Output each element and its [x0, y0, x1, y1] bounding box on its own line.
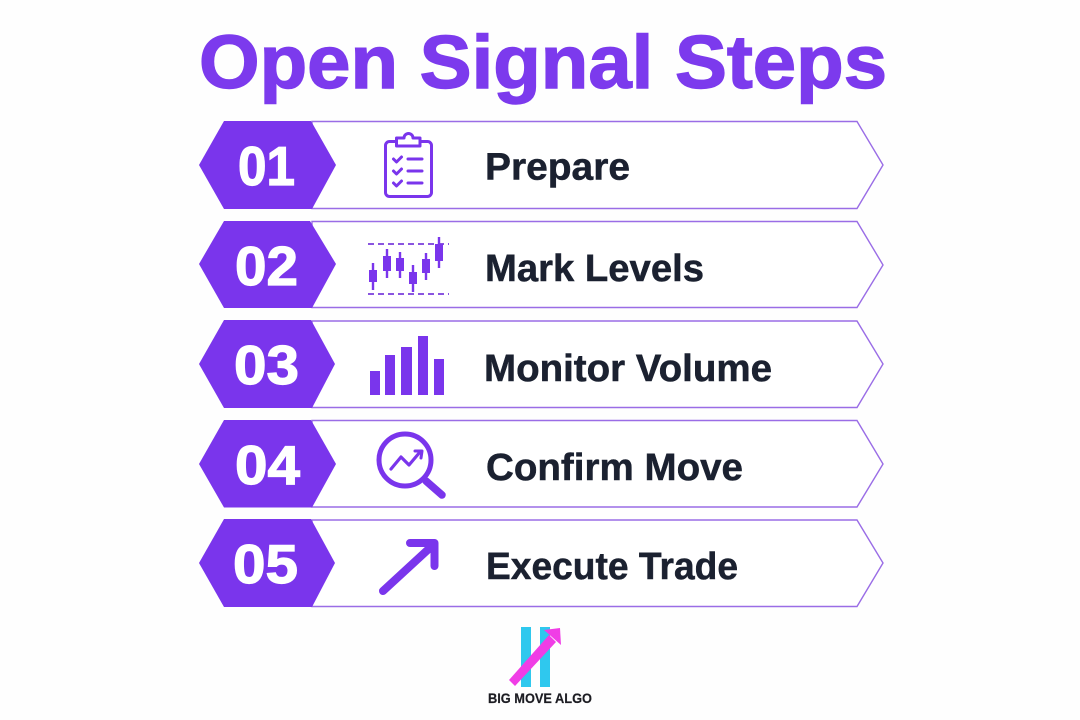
step 4 hexagon: [199, 420, 336, 508]
icon: clipboard checklist: [386, 134, 432, 196]
step 4 label: Confirm Move: [486, 447, 743, 489]
step 1 number: 01: [238, 135, 295, 197]
icon: candlestick chart with levels: [368, 237, 449, 294]
step 4 outline: [312, 420, 883, 507]
icon: diagonal arrow: [383, 543, 434, 591]
step 1 hexagon: [199, 121, 336, 209]
step 4: confirm move: [199, 420, 883, 508]
step 4 number: 04: [235, 434, 300, 496]
logo mark: [509, 627, 561, 687]
step 2 number: 02: [235, 235, 298, 297]
title: Open Signal Steps: [199, 20, 887, 104]
step 5 label: Execute Trade: [486, 546, 738, 588]
step 5 hexagon: [199, 519, 335, 607]
step 3 hexagon: [199, 320, 335, 408]
logo wordmark: BIG MOVE ALGO: [488, 690, 592, 706]
icon: volume bars: [370, 336, 444, 395]
step 2 outline: [312, 222, 883, 308]
step 5 number: 05: [233, 533, 298, 595]
step 3: monitor volume: [199, 320, 883, 408]
step 2: mark levels: [199, 221, 883, 308]
step 1 label: Prepare: [485, 146, 630, 188]
step 3 label: Monitor Volume: [484, 348, 772, 390]
logo: big move algo: [488, 627, 592, 706]
step 1 outline: [312, 122, 883, 208]
step 5: execute trade: [199, 519, 883, 607]
step 5 outline: [312, 520, 883, 606]
icon: magnifier with trend line: [379, 434, 442, 495]
step 2 hexagon: [199, 221, 336, 308]
step 2 label: Mark Levels: [485, 248, 704, 290]
step 3 number: 03: [234, 334, 299, 396]
step 3 outline: [312, 321, 883, 408]
step 1: prepare: [199, 121, 883, 209]
